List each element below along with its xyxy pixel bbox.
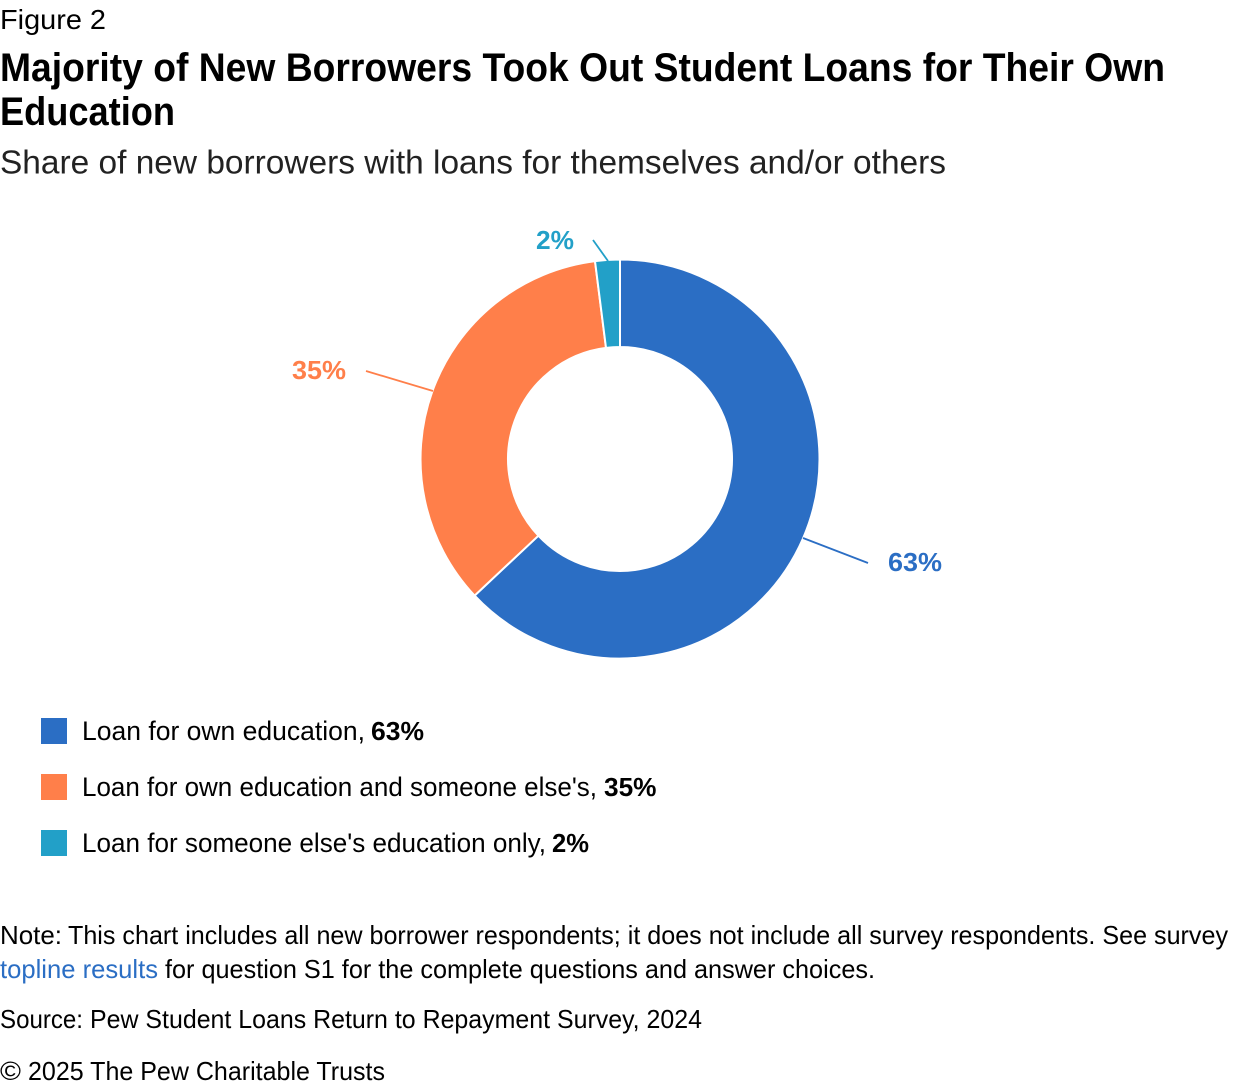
legend item: someone else's only: Loan for someone else's education only, (82, 828, 546, 858)
legend item: own and someone else's: Loan for own education and someone else's, (82, 772, 597, 802)
legend item: someone else's only: 2% (552, 828, 589, 858)
source: Pew Student Loans Return to Repayment Survey, 2024 (90, 1004, 702, 1034)
title: Education (0, 90, 175, 134)
segment: own education 63% (475, 260, 819, 658)
segment: someone else's only 2% (595, 260, 620, 348)
title: Majority of New Borrowers Took Out Student Loans for Their Own (0, 46, 1165, 90)
callout: 2% (536, 225, 608, 261)
note: Note: (0, 920, 62, 950)
copyright: 2025 The Pew Charitable Trusts (28, 1056, 385, 1086)
subtitle: Share of new borrowers with loans for themselves and/or others (0, 144, 946, 180)
source: Source: (0, 1004, 83, 1034)
copyright: © (0, 1056, 21, 1086)
callout: 35%: 35% (292, 355, 346, 385)
legend item: own and someone else's: 35% (604, 772, 656, 802)
callout: 63% (803, 538, 942, 577)
figure label: Figure 2 (0, 4, 106, 35)
legend item: own education: Loan for own education, (82, 716, 365, 746)
legend item: own education: 63% (371, 716, 424, 746)
callout: 2%: 2% (536, 225, 574, 255)
title (0, 46, 1165, 134)
note (0, 920, 1228, 984)
note: for question S1 for the complete questions and answer choices. (165, 954, 875, 984)
donut chart (421, 260, 819, 658)
callout: 35% (292, 355, 433, 391)
callout: 63%: 63% (888, 547, 942, 577)
note: This chart includes all new borrower respondents; it does not include all survey respondents. See survey (68, 920, 1228, 950)
segment: own education and someone else's 35% (421, 261, 606, 596)
note: topline results (0, 954, 158, 984)
legend (41, 716, 656, 858)
